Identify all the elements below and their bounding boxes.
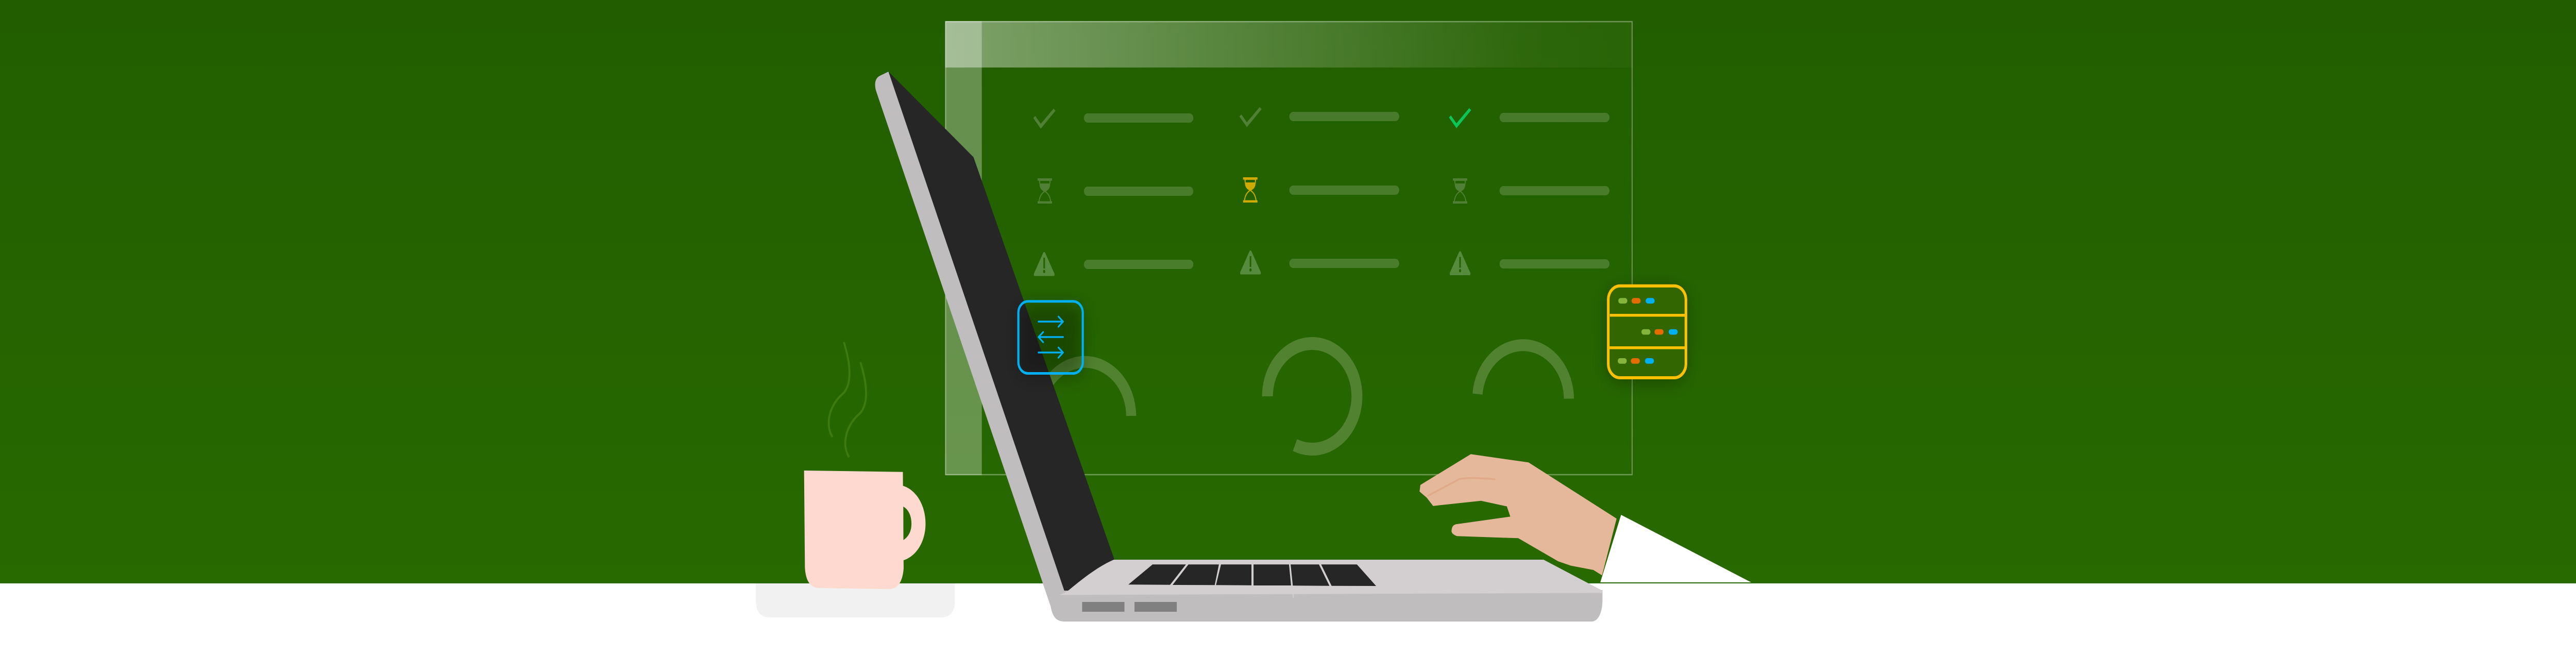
laptop [875,72,1602,622]
column 1 status rows [1084,113,1193,269]
transfer arrows [1039,316,1063,358]
keyboard [1128,564,1376,586]
icon: hourglass column 3 [1453,178,1467,204]
mug body [804,471,904,589]
callout: blue transfer icon [1019,301,1083,377]
panel header band [945,21,1633,68]
yellow box shadow [1608,289,1686,381]
coffee mug [804,471,925,589]
icon: warning column 3 [1450,251,1470,275]
icon: hourglass column 2 active [1243,177,1258,203]
column 3 status rows [1500,113,1609,269]
icon: check column 3 active [1449,108,1471,128]
donut chart column 3 [1478,345,1569,399]
finger crease [1428,478,1495,496]
saucer [756,583,955,617]
port 2 [1134,602,1177,612]
server row 1 lights [1618,298,1655,304]
blue box outline [1019,301,1083,373]
panel: floating dashboard window [945,21,1633,475]
hand shape [1420,455,1616,575]
icon: hourglass column 1 [1038,178,1052,204]
callout: yellow server icon [1608,286,1686,381]
column 2 status rows [1290,112,1399,268]
laptop lid back and base shell [875,72,1602,622]
laptop deck [1059,560,1602,595]
icon: check column 2 [1240,107,1262,127]
icon: check column 1 [1033,109,1056,129]
hand [1420,455,1616,575]
yellow box outline [1608,286,1686,378]
blue box shadow [1019,304,1083,377]
server row 3 lights [1618,358,1654,364]
donut chart column 2 [1267,344,1357,449]
mug handle [899,486,925,561]
panel frame [945,22,1632,475]
server row dividers [1609,314,1686,349]
donut chart column 1 [1039,362,1131,416]
deck seam [1292,594,1294,598]
port 1 [1082,602,1125,612]
shirt cuff [1600,515,1751,582]
panel left strip [945,21,982,475]
icon: warning column 2 [1240,250,1261,274]
laptop screen [889,72,1114,591]
server row 2 lights [1641,329,1677,334]
steam above cup [829,342,866,457]
icon: warning column 1 [1034,252,1055,276]
